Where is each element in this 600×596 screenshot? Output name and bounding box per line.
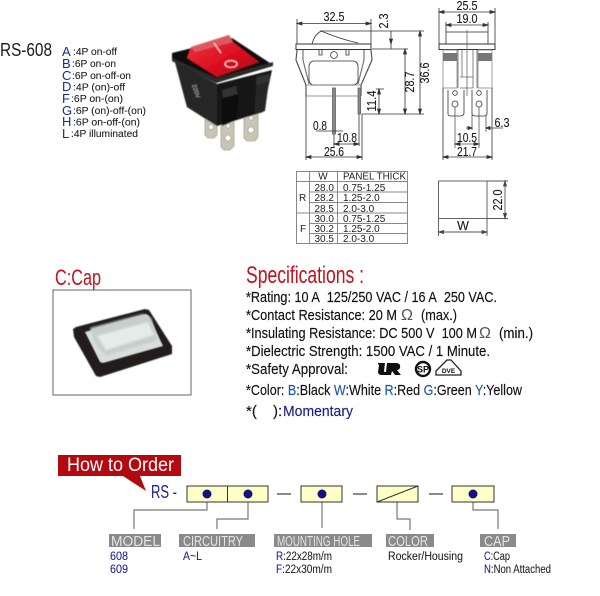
panel thickness table: 30.0 bbox=[314, 214, 334, 225]
label: cap bbox=[480, 533, 551, 576]
side dimension labels: 11.4 bbox=[365, 90, 379, 112]
side dimension labels: 28.7 bbox=[403, 71, 417, 92]
circuit type list: :4P (on)-off bbox=[73, 82, 125, 94]
side dimension labels: 0.8 bbox=[313, 119, 327, 133]
icon: VDE mark: DVE bbox=[442, 368, 456, 375]
specifications list: (max.) bbox=[421, 307, 457, 324]
panel thickness table: 30.5 bbox=[314, 234, 334, 245]
label: model: 609 bbox=[110, 564, 128, 576]
product photo: rocker switch: 220V bbox=[190, 84, 200, 99]
rocker bbox=[187, 35, 259, 77]
specifications heading: Specifications : bbox=[246, 262, 364, 289]
circuit type list: A bbox=[62, 44, 71, 59]
panel thickness table: 28.0 bbox=[314, 183, 334, 194]
cap heading: C:Cap bbox=[55, 265, 101, 290]
panel thickness table: 2.0-3.0 bbox=[343, 234, 375, 245]
side dimension labels: 32.5 bbox=[324, 10, 345, 24]
specifications list: (min.) bbox=[499, 325, 533, 342]
circuit type list: H bbox=[62, 114, 71, 129]
circuit type list: C bbox=[62, 68, 71, 83]
side dimension labels: 10.8 bbox=[337, 131, 357, 145]
front dimension labels: 10.5 bbox=[457, 131, 477, 145]
label: mounting hole: MOUNTING HOLE bbox=[277, 533, 360, 550]
icon: VDE mark bbox=[436, 360, 461, 375]
how to order banner bbox=[58, 455, 181, 491]
panel cutout diagram: 22.0 bbox=[491, 189, 505, 210]
label: model bbox=[109, 533, 161, 576]
circuit type list: :6P on-on bbox=[72, 59, 116, 70]
panel cutout diagram: W bbox=[457, 219, 469, 233]
panel thickness table: 28.5 bbox=[314, 204, 334, 215]
label: mounting hole bbox=[274, 533, 372, 576]
circuit type list: B bbox=[62, 56, 71, 71]
circuit type list: G bbox=[62, 103, 72, 118]
front dimension labels: 6.3 bbox=[494, 116, 510, 130]
icon: CSA mark: SP bbox=[417, 364, 429, 374]
panel thickness table: 1.25-2.0 bbox=[343, 193, 380, 204]
label: color bbox=[386, 533, 463, 563]
product photo: rocker switch bbox=[172, 35, 273, 150]
terminals bbox=[205, 110, 258, 150]
icon: CSA mark bbox=[416, 362, 430, 376]
how to order banner: How to Order bbox=[67, 455, 175, 476]
panel thickness table: 28.2 bbox=[314, 193, 334, 204]
circuit type list: :6P on-off-on bbox=[72, 71, 131, 82]
icon: UR mark bbox=[378, 363, 401, 375]
side dimension labels bbox=[313, 10, 432, 159]
panel cutout diagram bbox=[438, 181, 508, 236]
order code prefix: RS - bbox=[151, 482, 177, 502]
order code boxes bbox=[187, 486, 494, 502]
front dimension labels: 19.0 bbox=[456, 12, 478, 26]
label: model: MODEL bbox=[111, 533, 160, 550]
label: cap: N:Non Attached bbox=[484, 564, 551, 576]
label: circuitry: A~L bbox=[183, 551, 203, 563]
specifications list: *( bbox=[246, 403, 257, 420]
model name: RS-608 bbox=[0, 39, 52, 60]
panel thickness table: F bbox=[300, 224, 306, 235]
specifications list: ): bbox=[273, 403, 282, 420]
panel thickness table: 2.0-3.0 bbox=[343, 204, 375, 215]
body bbox=[175, 62, 272, 126]
specifications list: *Insulating Resistance: DC 500 V 100 M bbox=[246, 325, 477, 342]
circuit type list bbox=[62, 44, 146, 141]
side dimension drawing bbox=[296, 19, 424, 160]
circuit type list: :4P on-off bbox=[73, 47, 117, 58]
front dimension labels: 21.7 bbox=[457, 145, 477, 159]
clear cover bbox=[85, 314, 163, 363]
circuit type list: L bbox=[62, 126, 69, 141]
specifications list bbox=[246, 289, 533, 420]
panel thickness table: W bbox=[318, 172, 328, 182]
circuit type list: :6P on-off-(on) bbox=[73, 118, 140, 128]
label: color: COLOR bbox=[388, 533, 428, 550]
order code connector lines bbox=[134, 502, 498, 530]
specifications list: *Safety Approval: bbox=[246, 361, 348, 378]
label: circuitry bbox=[179, 533, 255, 563]
label: model: 608 bbox=[110, 551, 128, 563]
circuit type list: :6P (on)-off-(on) bbox=[73, 106, 146, 117]
specifications list: *Contact Resistance: 20 M bbox=[246, 307, 397, 324]
panel thickness table: 0.75-1.25 bbox=[343, 183, 386, 194]
specifications list: *Color: B:Black W:White R:Red G:Green Y:Yellow bbox=[246, 382, 522, 399]
circuit type list: :4P illuminated bbox=[71, 129, 138, 140]
front dimension drawing bbox=[439, 8, 503, 160]
panel thickness table: 0.75-1.25 bbox=[343, 214, 386, 225]
label: circuitry: CIRCUITRY bbox=[183, 533, 243, 550]
side dimension labels: 2.3 bbox=[377, 13, 391, 28]
side dimension labels: 36.6 bbox=[418, 62, 432, 84]
side dimension labels: 25.6 bbox=[324, 145, 344, 159]
panel thickness table: 30.2 bbox=[314, 224, 334, 235]
specifications list: Ω bbox=[401, 307, 413, 324]
panel thickness table: PANEL THICK bbox=[343, 172, 406, 182]
cap frame bbox=[73, 309, 172, 377]
specifications list: *Rating: 10 A 125/250 VAC / 16 A 250 VAC. bbox=[246, 289, 497, 306]
circuit type list: :6P on-(on) bbox=[71, 94, 123, 105]
panel thickness table bbox=[296, 171, 408, 245]
circuit type list: D bbox=[62, 79, 71, 94]
label: mounting hole: F:22x30m/m bbox=[276, 564, 332, 576]
specifications list: *Dielectric Strength: 1500 VAC / 1 Minute. bbox=[246, 343, 490, 360]
label: color: Rocker/Housing bbox=[388, 551, 463, 563]
label: cap: CAP bbox=[484, 533, 510, 550]
label: mounting hole: R:22x28m/m bbox=[276, 551, 332, 563]
label: cap: C:Cap bbox=[484, 551, 510, 563]
front dimension labels bbox=[456, 0, 510, 159]
panel thickness table: R bbox=[299, 193, 306, 204]
specifications list: Momentary bbox=[283, 403, 353, 420]
circuit type list: F bbox=[62, 91, 70, 106]
bezel bbox=[172, 38, 273, 83]
panel: cap photo bbox=[53, 290, 191, 395]
specifications list: Ω bbox=[479, 325, 491, 342]
panel thickness table: 1.25-2.0 bbox=[343, 224, 380, 235]
